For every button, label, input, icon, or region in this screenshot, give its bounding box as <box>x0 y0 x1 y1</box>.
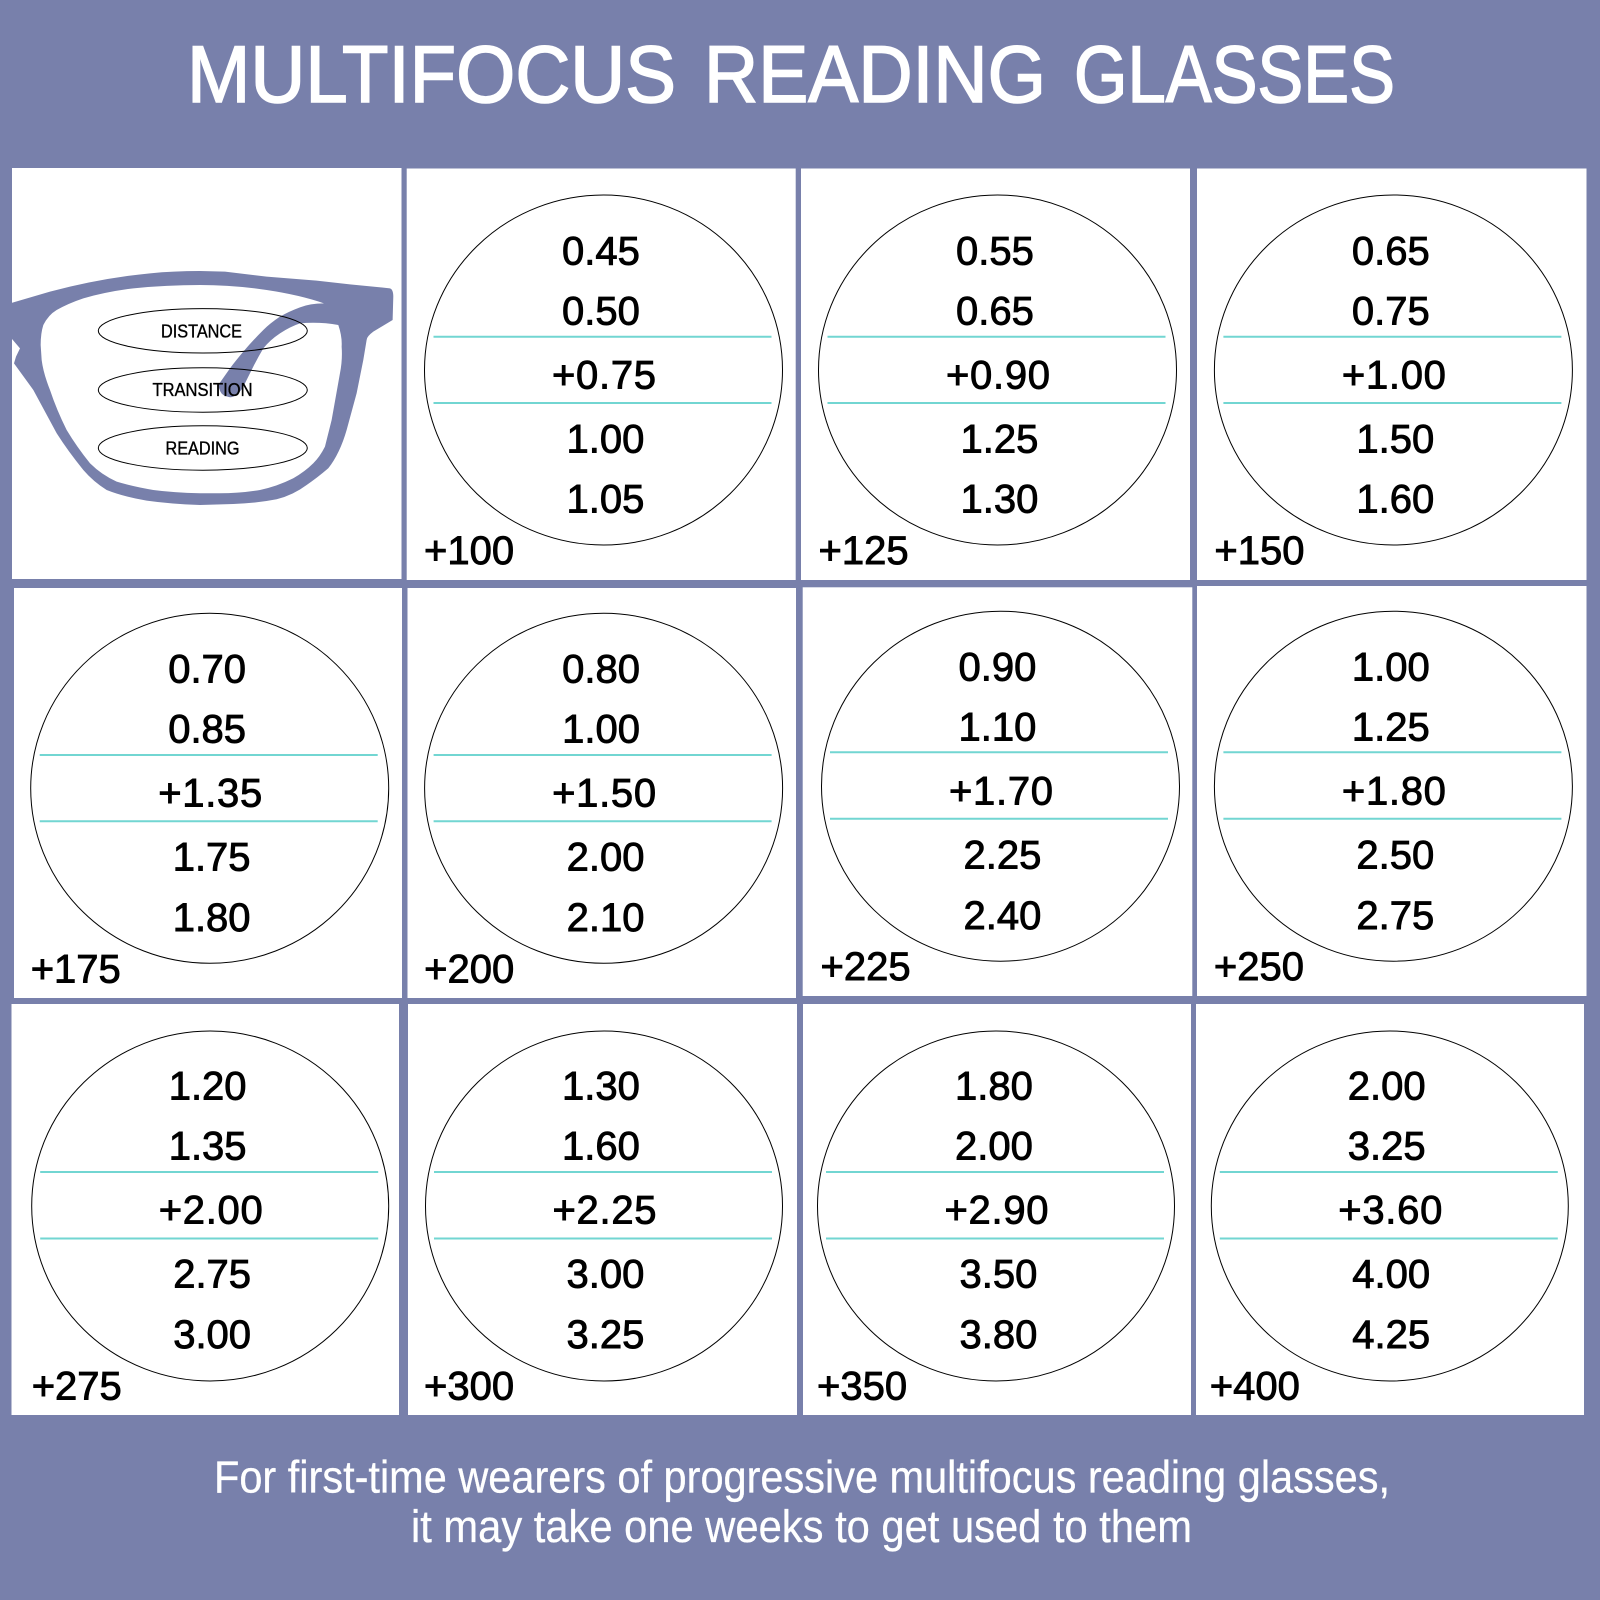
lens chart: +150 <box>1214 195 1572 573</box>
panel: +400 <box>1196 1004 1584 1415</box>
zone: distance <box>98 309 307 353</box>
lens chart: +175: +175 <box>31 947 121 991</box>
lens chart: +100: +100 <box>424 529 514 573</box>
lens chart: +400: +3.60 <box>1338 1188 1443 1232</box>
zone: transition: TRANSITION <box>152 380 252 400</box>
lens chart: +150: 1.60 <box>1356 478 1434 522</box>
panel: +250 <box>1197 586 1586 996</box>
footer note: it may take one weeks to get used to them <box>411 1501 1192 1552</box>
lens chart: +350 <box>817 1031 1174 1408</box>
title: MULTIFOCUS <box>187 30 676 120</box>
lens chart: +250: 2.75 <box>1356 894 1434 938</box>
lens chart: +225: +225 <box>820 945 911 989</box>
lens chart: +125: +125 <box>818 529 909 573</box>
panel: +300 <box>408 1004 797 1415</box>
lens chart: +225: 2.25 <box>964 834 1041 878</box>
lens chart: +150: +1.00 <box>1342 353 1447 397</box>
lens chart: +125: 0.55 <box>956 229 1034 273</box>
lens chart: +400: 2.00 <box>1348 1064 1426 1108</box>
lens chart: +250 <box>1214 611 1572 989</box>
lens chart: +200: +200 <box>424 947 514 991</box>
lens chart: +350: 2.00 <box>955 1124 1033 1168</box>
lens chart: +125: 1.25 <box>960 417 1038 461</box>
footer note: For first-time wearers of progressive multifocus reading glasses, <box>214 1452 1390 1502</box>
lens chart: +200: 2.10 <box>567 896 644 940</box>
lens chart: +250: 1.25 <box>1352 706 1430 750</box>
lens chart: +300 <box>424 1031 782 1408</box>
lens chart: +300: +300 <box>424 1364 514 1408</box>
lens chart: +275: 2.75 <box>173 1252 251 1296</box>
panel: +200 <box>408 588 796 998</box>
lens chart: +150: +150 <box>1214 529 1305 573</box>
lens chart: +275 <box>32 1031 389 1408</box>
icon: glasses frame <box>10 271 393 505</box>
lens chart: +225: 0.90 <box>958 646 1036 690</box>
title <box>187 30 1395 120</box>
lens chart: +175: 1.80 <box>173 896 251 940</box>
lens chart: +300: 3.25 <box>566 1313 644 1357</box>
panel: +100 <box>407 168 796 580</box>
zone: distance: DISTANCE <box>161 321 242 341</box>
lens chart: +175: 0.85 <box>168 708 246 752</box>
lens chart: +400: 4.00 <box>1352 1252 1430 1296</box>
lens chart: +200 <box>424 613 783 991</box>
panel: glasses zones diagram <box>10 168 402 579</box>
lens chart: +125: 0.65 <box>956 289 1034 333</box>
lens chart: +125 <box>818 195 1176 573</box>
lens chart: +300: 1.30 <box>562 1064 640 1108</box>
lens chart: +175: 1.75 <box>173 836 251 880</box>
lens chart: +150: 0.65 <box>1352 229 1430 273</box>
title: READING <box>704 30 1046 120</box>
lens chart: +200: 1.00 <box>562 708 640 752</box>
panel: +150 <box>1197 168 1586 580</box>
lens chart: +275: +275 <box>32 1364 122 1408</box>
lens chart: +150: 0.75 <box>1352 289 1430 333</box>
lens chart: +350: +350 <box>817 1364 907 1408</box>
lens chart: +275: 1.20 <box>169 1064 247 1108</box>
lens chart: +100: +0.75 <box>552 353 657 397</box>
lens chart: +300: +2.25 <box>552 1188 657 1232</box>
panel: +225 <box>803 587 1192 996</box>
lens chart: +350: 1.80 <box>955 1064 1033 1108</box>
title: GLASSES <box>1074 30 1395 120</box>
lens chart: +225 <box>820 611 1180 989</box>
lens chart: +250: 1.00 <box>1352 646 1430 690</box>
lens chart: +250: +250 <box>1214 945 1304 989</box>
panel: +125 <box>801 168 1190 580</box>
lens chart: +200: +1.50 <box>552 772 657 816</box>
zone: reading: READING <box>166 439 240 459</box>
lens chart: +300: 3.00 <box>566 1252 644 1296</box>
lens chart: +175 <box>31 613 389 991</box>
lens chart: +400: 4.25 <box>1352 1313 1430 1357</box>
lens chart: +300: 1.60 <box>562 1124 640 1168</box>
lens chart: +400: +400 <box>1210 1364 1300 1408</box>
lens chart: +200: 2.00 <box>567 836 644 880</box>
lens chart: +200: 0.80 <box>562 648 640 692</box>
zone: reading <box>98 426 307 470</box>
lens chart: +275: +2.00 <box>159 1188 263 1232</box>
lens chart: +400: 3.25 <box>1348 1124 1426 1168</box>
lens chart: +275: 1.35 <box>169 1124 247 1168</box>
lens chart: +100 <box>424 195 782 573</box>
lens chart: +100: 1.00 <box>566 417 644 461</box>
lens chart: +250: 2.50 <box>1356 834 1434 878</box>
lens chart: +150: 1.50 <box>1356 417 1434 461</box>
panel: +275 <box>12 1004 399 1415</box>
lens chart: +275: 3.00 <box>173 1313 251 1357</box>
lens chart: +225: 1.10 <box>958 706 1036 750</box>
lens chart: +400 <box>1210 1031 1568 1408</box>
lens chart: +225: 2.40 <box>964 894 1041 938</box>
lens chart: +225: +1.70 <box>949 770 1054 814</box>
zone: transition <box>98 368 307 412</box>
lens chart: +100: 0.45 <box>562 229 640 273</box>
lens chart: +125: 1.30 <box>960 478 1038 522</box>
lens chart: +350: 3.50 <box>960 1252 1037 1296</box>
lens chart: +175: +1.35 <box>158 772 263 816</box>
lens chart: +350: +2.90 <box>944 1188 1049 1232</box>
lens chart: +250: +1.80 <box>1342 770 1447 814</box>
panel: +350 <box>803 1004 1191 1415</box>
footer note <box>214 1452 1390 1552</box>
lens chart: +125: +0.90 <box>946 353 1051 397</box>
lens chart: +350: 3.80 <box>960 1313 1037 1357</box>
lens chart: +100: 0.50 <box>562 289 640 333</box>
panel: +175 <box>14 588 402 998</box>
lens chart: +175: 0.70 <box>168 648 246 692</box>
lens chart: +100: 1.05 <box>566 478 644 522</box>
